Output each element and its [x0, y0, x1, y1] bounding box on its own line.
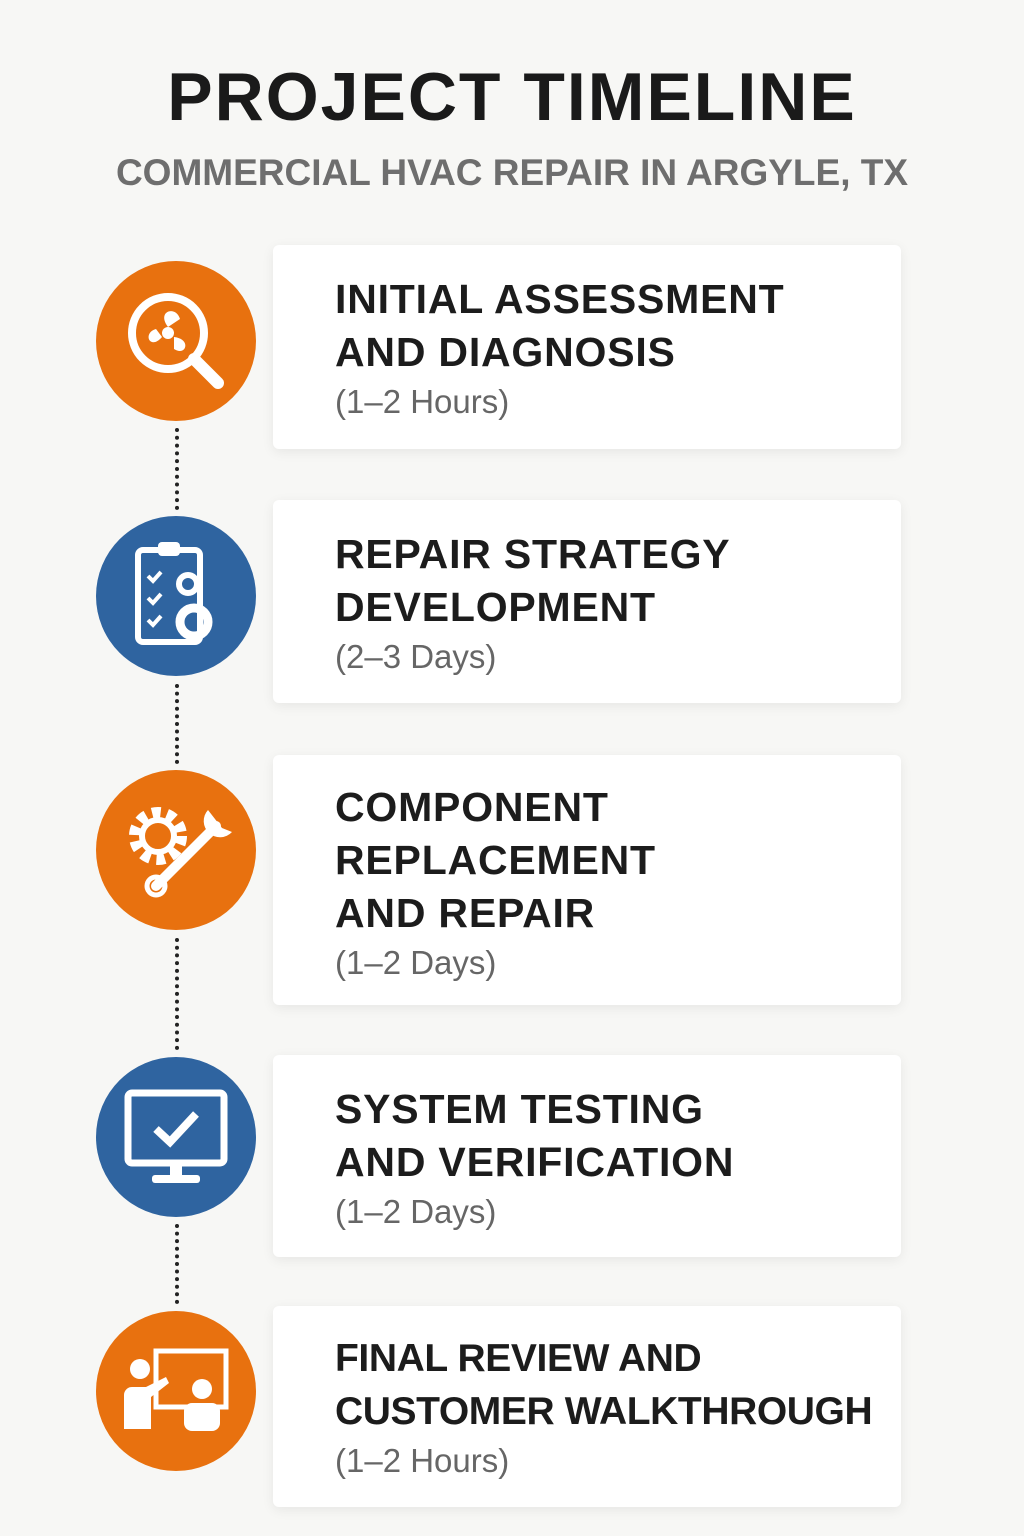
card 3: (1–2 Days): [335, 944, 496, 981]
card 4: [273, 1055, 901, 1257]
card 2: [273, 500, 901, 703]
card 2: REPAIR STRATEGY: [335, 531, 730, 577]
card 5: FINAL REVIEW AND: [335, 1337, 701, 1380]
card 2: (2–3 Days): [335, 638, 496, 675]
card 3: COMPONENT: [335, 784, 609, 830]
card 1: (1–2 Hours): [335, 383, 509, 420]
card 1: INITIAL ASSESSMENT: [335, 276, 785, 322]
icon: gear wrench: [96, 770, 256, 930]
card 3: REPLACEMENT: [335, 837, 656, 883]
card 5: (1–2 Hours): [335, 1442, 509, 1479]
icon: fan magnifier: [96, 261, 256, 421]
card 4: (1–2 Days): [335, 1193, 496, 1230]
title: PROJECT TIMELINE: [167, 59, 857, 135]
card 1: AND DIAGNOSIS: [335, 329, 676, 375]
card 1: [273, 245, 901, 449]
card 4: AND VERIFICATION: [335, 1139, 734, 1185]
card 3: AND REPAIR: [335, 890, 595, 936]
card 5: CUSTOMER WALKTHROUGH: [335, 1390, 872, 1433]
subtitle: COMMERCIAL HVAC REPAIR IN ARGYLE, TX: [116, 152, 908, 193]
icon: clipboard gears: [96, 516, 256, 676]
icon: monitor check: [96, 1057, 256, 1217]
connector dots: [175, 428, 183, 510]
card 3: [273, 755, 901, 1005]
card 2: DEVELOPMENT: [335, 584, 656, 630]
icon: presentation: [96, 1311, 256, 1471]
card 4: SYSTEM TESTING: [335, 1086, 704, 1132]
card 5: [273, 1306, 901, 1507]
